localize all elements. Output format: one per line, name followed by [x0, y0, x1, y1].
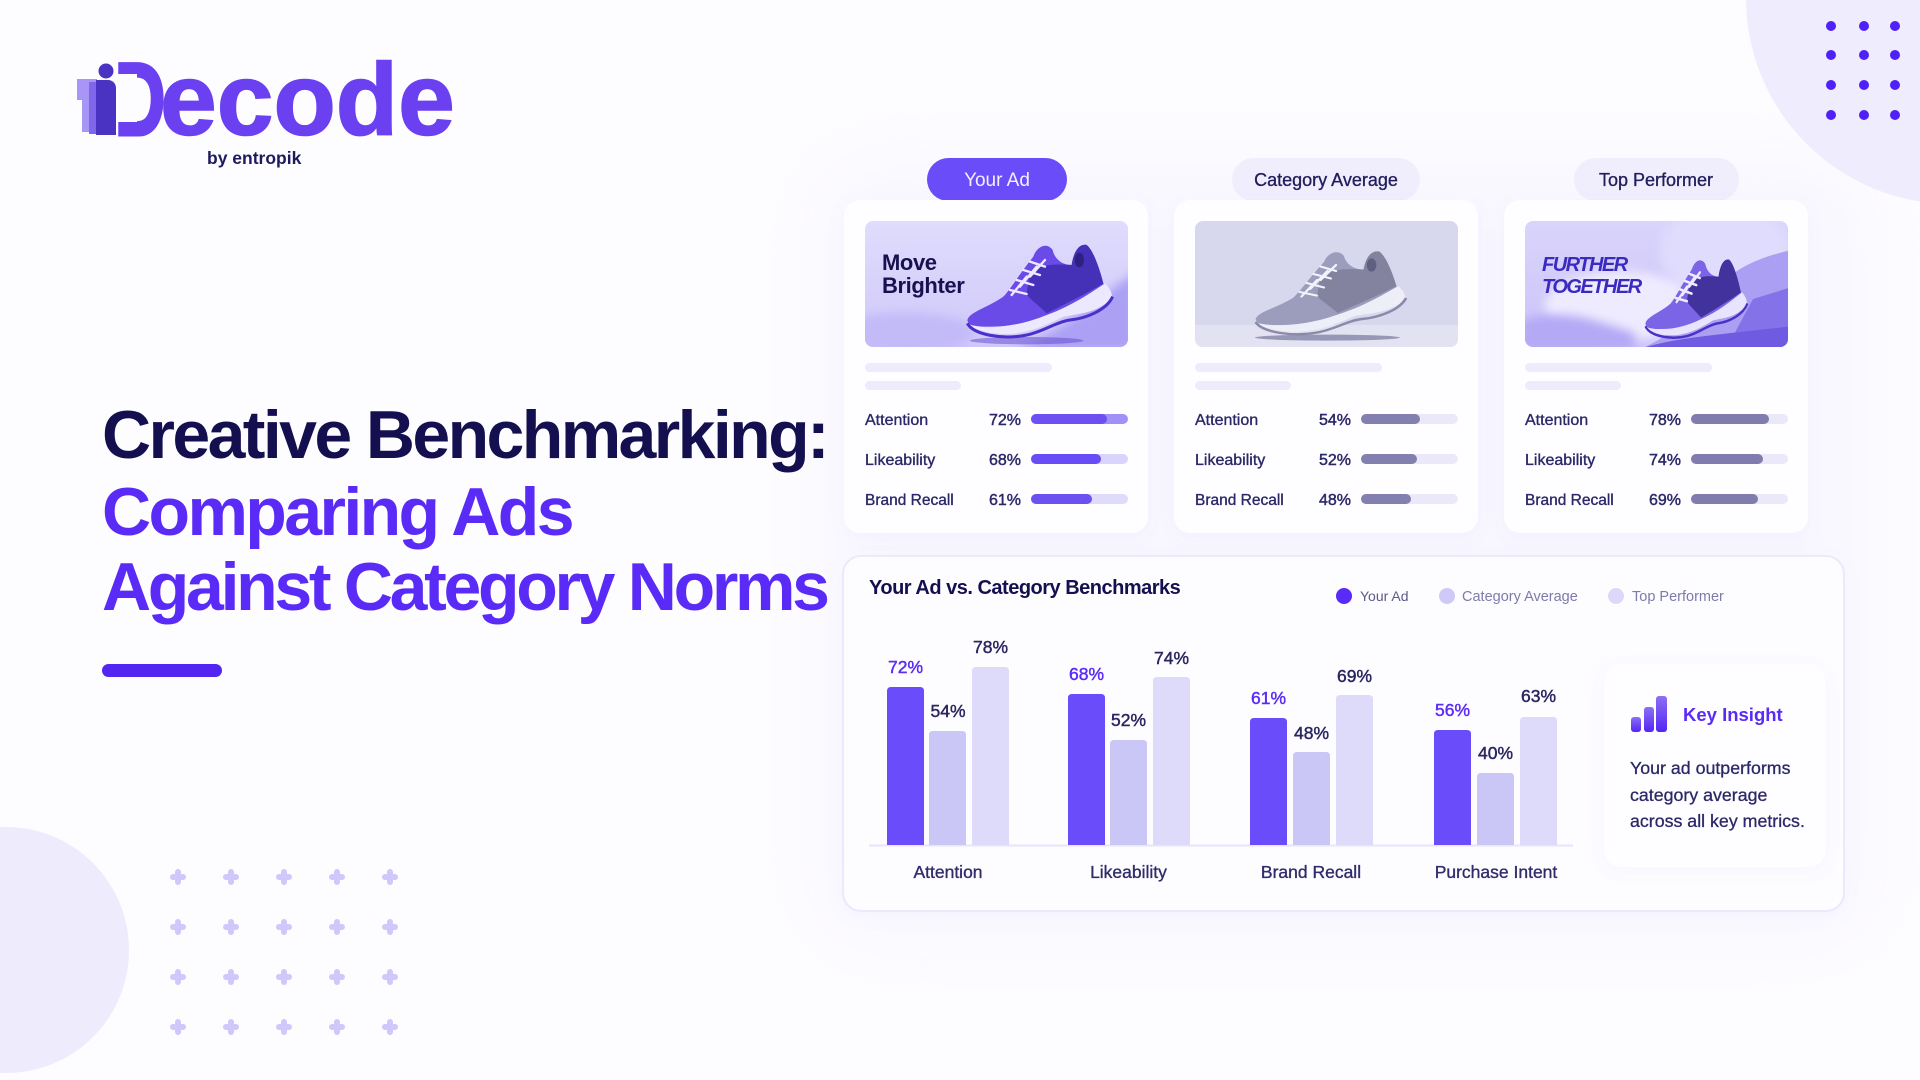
- ad image: Move Brighter: [865, 221, 1128, 347]
- dot grid: top right: [1826, 21, 1900, 120]
- axis: [869, 844, 1573, 846]
- metric: Likeability: Likeability: [1525, 452, 1595, 469]
- bar group: Purchase Intent: 63%: [1521, 686, 1556, 706]
- metric: Attention: 72%: [989, 412, 1021, 429]
- pill: Your Ad: [927, 158, 1067, 201]
- title underline: [102, 664, 222, 677]
- bar group: Likeability: 68%: [1069, 664, 1104, 684]
- title: Creative Benchmarking:: [102, 397, 827, 473]
- ad image: Further Together: TOGETHER: [1542, 276, 1643, 298]
- logo: iDecode by entropik: by entropik: [207, 148, 302, 168]
- bar group: Likeability: 74%: [1154, 648, 1189, 668]
- bar group: Brand Recall: 48%: [1294, 723, 1329, 743]
- bar group: Attention: [887, 637, 1009, 882]
- bar group: Attention: Attention: [913, 862, 983, 882]
- metric: Brand Recall: 48%: [1319, 492, 1351, 509]
- decorative circle: top right: [1746, 0, 1920, 204]
- panel: benchmark chart: [843, 556, 1844, 911]
- metric: Attention: 54%: [1319, 412, 1351, 429]
- callout: Key Insight: category average: [1630, 785, 1768, 805]
- callout: Key Insight: across all key metrics.: [1630, 811, 1805, 831]
- metric: Brand Recall: Brand Recall: [1525, 492, 1614, 509]
- metric: Brand Recall: [1525, 492, 1788, 509]
- bar group: Brand Recall: [1250, 666, 1373, 882]
- pill: Your Ad: Your Ad: [964, 170, 1030, 191]
- legend: [1336, 588, 1724, 605]
- bar group: Attention: 78%: [973, 637, 1008, 657]
- logo: iDecode by entropik: ecode: [160, 42, 455, 156]
- chart title: Your Ad vs. Category Benchmarks: [869, 577, 1181, 599]
- ad image: Further Together: FURTHER: [1542, 254, 1629, 276]
- legend: Category Average: [1462, 589, 1578, 605]
- callout: Key Insight: Key Insight: [1683, 704, 1783, 725]
- decorative circle: bottom left: [0, 827, 129, 1073]
- metric: Attention: [1195, 412, 1458, 429]
- metric: Brand Recall: 69%: [1649, 492, 1681, 509]
- bar group: Brand Recall: Brand Recall: [1261, 862, 1361, 882]
- bar group: Purchase Intent: 56%: [1435, 700, 1470, 720]
- bar group: Likeability: [1068, 648, 1190, 882]
- bar group: Attention: 72%: [888, 657, 923, 677]
- bar group: Attention: 54%: [930, 701, 966, 721]
- metric: Brand Recall: [865, 492, 1128, 509]
- panel: Category Average card: [1194, 200, 1458, 506]
- metric: Likeability: [865, 452, 1128, 469]
- panel: Your Ad card: [864, 200, 1128, 506]
- metric: Likeability: [1195, 452, 1458, 469]
- bar group: Purchase Intent: 40%: [1478, 743, 1513, 763]
- icon: bar chart: [1631, 696, 1667, 732]
- metric: Likeability: 52%: [1319, 452, 1351, 469]
- metric: Attention: Attention: [865, 412, 928, 429]
- ad image: Further Together: [1525, 221, 1788, 347]
- logo: iDecode by entropik: D: [115, 43, 165, 157]
- title: Comparing Ads: [102, 474, 573, 550]
- placeholder lines: [865, 363, 1052, 390]
- placeholder lines: [1195, 363, 1382, 390]
- pill: Category Average: [1232, 158, 1420, 201]
- metric: Brand Recall: [1195, 492, 1458, 509]
- metric: Attention: Attention: [1195, 412, 1258, 429]
- bar group: Purchase Intent: [1434, 686, 1557, 882]
- pill: Top Performer: Top Performer: [1599, 170, 1713, 190]
- bar group: Purchase Intent: Purchase Intent: [1435, 862, 1557, 882]
- pill: Category Average: Category Average: [1254, 170, 1398, 190]
- ad image: grey shoe: [1195, 221, 1458, 347]
- panel: Top Performer card: [1524, 200, 1788, 506]
- metric: Attention: Attention: [1525, 412, 1588, 429]
- ad image: Move Brighter: Move: [882, 250, 937, 275]
- legend: Top Performer: [1632, 589, 1724, 605]
- placeholder lines: [1525, 363, 1712, 390]
- pill: Top Performer: [1574, 158, 1739, 201]
- bar group: Brand Recall: 69%: [1337, 666, 1372, 686]
- metric: Attention: [1525, 412, 1788, 429]
- callout: Key Insight: [1604, 664, 1826, 867]
- bar group: Brand Recall: 61%: [1251, 688, 1286, 708]
- metric: Brand Recall: Brand Recall: [1195, 492, 1284, 509]
- metric: Attention: [865, 412, 1128, 429]
- legend: Your Ad: [1360, 588, 1409, 604]
- ad image: Move Brighter: Brighter: [882, 273, 965, 298]
- plus grid: bottom left: [173, 872, 395, 1032]
- title: Against Category Norms: [102, 549, 828, 625]
- metric: Brand Recall: Brand Recall: [865, 492, 954, 509]
- metric: Likeability: 74%: [1649, 452, 1681, 469]
- bar group: Likeability: 52%: [1111, 710, 1146, 730]
- metric: Brand Recall: 61%: [989, 492, 1021, 509]
- callout: Key Insight: Your ad outperforms: [1630, 758, 1791, 778]
- title: [102, 397, 828, 625]
- metric: Attention: 78%: [1649, 412, 1681, 429]
- metric: Likeability: [1525, 452, 1788, 469]
- bar group: Likeability: Likeability: [1090, 862, 1167, 882]
- metric: Likeability: Likeability: [865, 452, 935, 469]
- metric: Likeability: Likeability: [1195, 452, 1265, 469]
- metric: Likeability: 68%: [989, 452, 1021, 469]
